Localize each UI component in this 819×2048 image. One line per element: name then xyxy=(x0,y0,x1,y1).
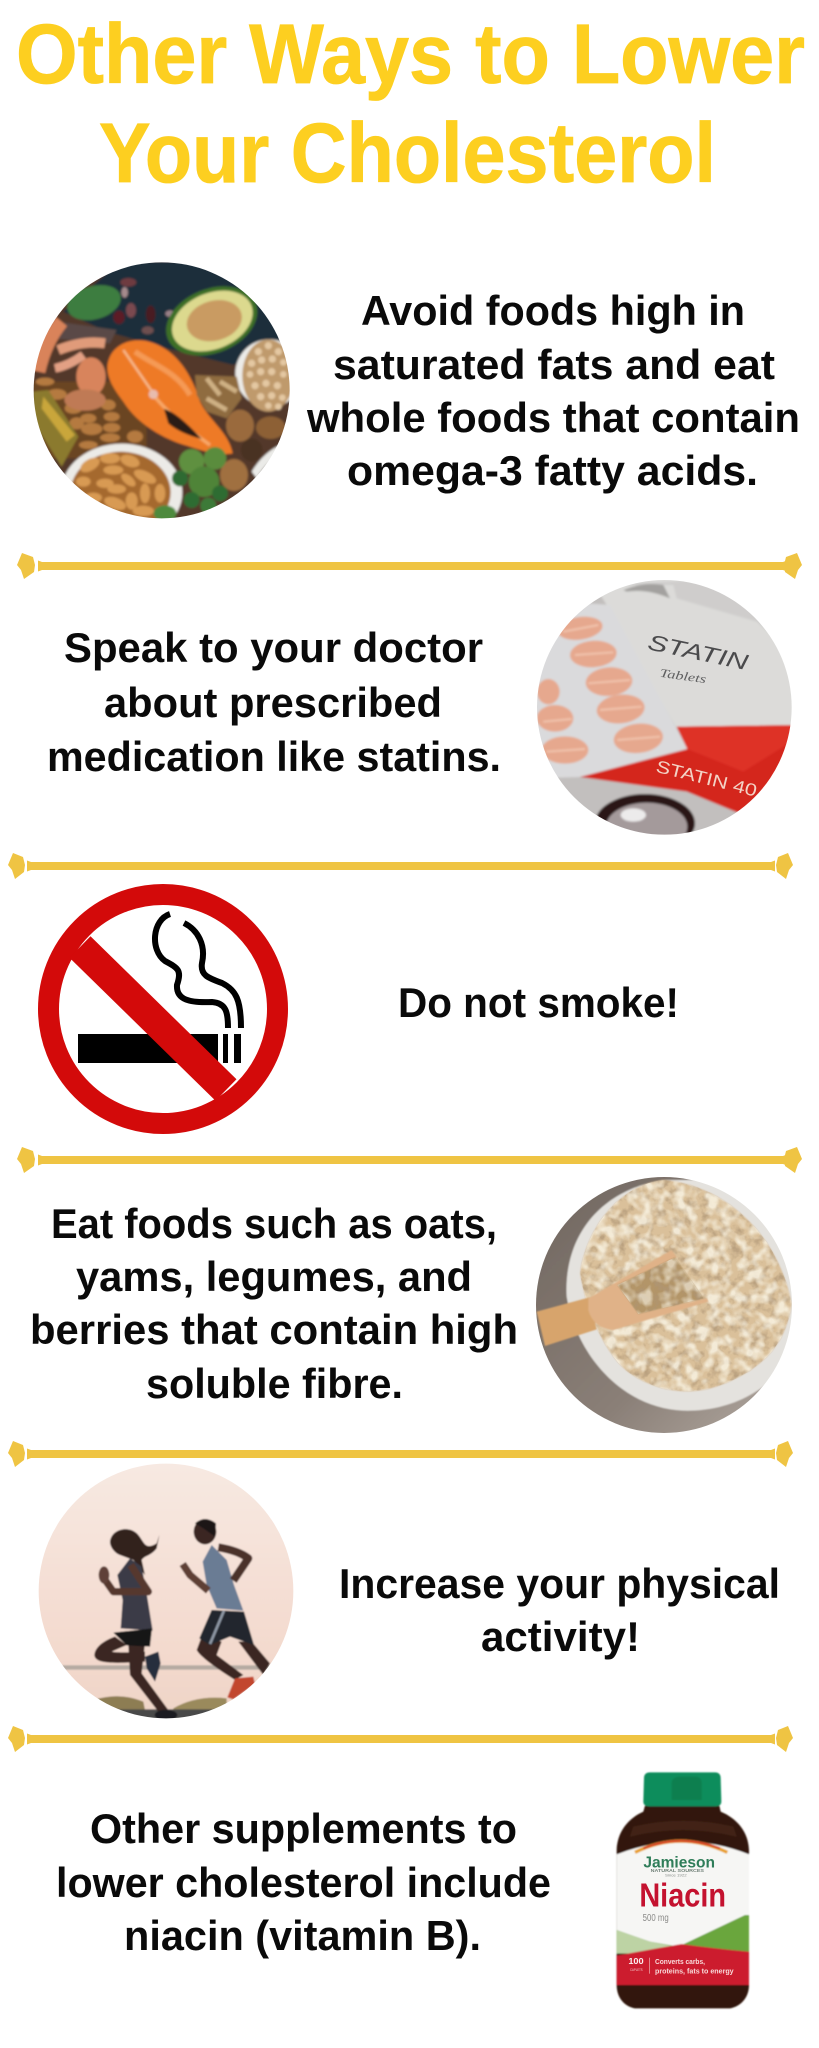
red band xyxy=(617,1944,749,1985)
divider 2 xyxy=(8,853,793,879)
woman runner xyxy=(110,1529,159,1575)
text: foods advice: omega-3 fatty acids. xyxy=(347,447,758,494)
bottle cap xyxy=(643,1772,721,1806)
text: fibre advice: berries that contain high xyxy=(30,1306,518,1353)
photo: niacin supplement bottle: Niacin xyxy=(639,1878,726,1915)
photo: niacin supplement bottle: 500 mg xyxy=(643,1913,669,1924)
blister pack xyxy=(533,603,687,778)
red box xyxy=(580,725,797,815)
shrimp xyxy=(38,322,62,372)
man runner xyxy=(194,1519,216,1544)
divider 5 xyxy=(8,1726,793,1752)
text: supplements advice: niacin (vitamin B). xyxy=(124,1912,481,1959)
panel: do not smoke xyxy=(48,894,679,1124)
text: do not smoke: Do not smoke! xyxy=(398,979,679,1026)
panel: statins xyxy=(47,578,797,853)
panel: physical activity xyxy=(37,1462,780,1723)
broccoli xyxy=(179,449,204,474)
text: supplements advice xyxy=(56,1805,551,1959)
icon: no smoking sign xyxy=(48,894,278,1124)
photo: niacin supplement bottle: Jamieson xyxy=(643,1854,715,1871)
label xyxy=(617,1841,749,1953)
text: fibre advice: yams, legumes, and xyxy=(76,1253,472,1300)
photo: niacin supplement bottle: CAPLETS xyxy=(630,1968,643,1972)
almond bowl xyxy=(64,442,184,518)
text: activity advice xyxy=(339,1560,780,1660)
avocado xyxy=(164,285,258,357)
photo: niacin supplement bottle: 100 xyxy=(628,1956,644,1966)
text: foods advice: Avoid foods high in xyxy=(361,287,745,334)
text: supplements advice: Other supplements to xyxy=(90,1805,517,1852)
text: foods advice: whole foods that contain xyxy=(306,394,800,441)
photo: bowl of oats xyxy=(533,1173,797,1437)
title: Your Cholesterol xyxy=(99,106,716,200)
photo: niacin supplement bottle: Converts carbs, xyxy=(655,1957,705,1966)
title xyxy=(16,7,805,200)
printed box text: STATIN xyxy=(646,629,750,675)
almonds left xyxy=(33,382,147,458)
photo: two runners xyxy=(37,1462,297,1723)
walnuts xyxy=(195,375,242,418)
salmon steak xyxy=(107,340,233,454)
divider 1 xyxy=(17,553,802,579)
text: fibre advice xyxy=(30,1200,518,1407)
text: statins advice xyxy=(47,624,501,780)
spinach leaf xyxy=(66,284,122,322)
text: activity advice: activity! xyxy=(481,1613,640,1660)
stethoscope disc xyxy=(596,792,696,833)
photo: statin tablets: Tablets xyxy=(659,666,708,686)
divider 4 xyxy=(8,1441,793,1467)
photo: omega-3 foods xyxy=(34,262,290,518)
text: supplements advice: lower cholesterol include xyxy=(56,1859,551,1906)
wooden scoop xyxy=(537,1297,597,1346)
text: statins advice: medication like statins. xyxy=(47,733,501,780)
photo: niacin supplement bottle: proteins, fats to energy xyxy=(655,1966,734,1975)
panel: supplements xyxy=(56,1772,749,2008)
divider 3 xyxy=(17,1147,802,1173)
oil bottle xyxy=(33,390,78,467)
text: activity advice: Increase your physical xyxy=(339,1560,780,1607)
text: foods advice: saturated fats and eat xyxy=(333,341,775,388)
chickpea bowl xyxy=(233,337,290,405)
photo: niacin supplement bottle: Since 1922 xyxy=(665,1873,688,1878)
text: statins advice: about prescribed xyxy=(104,679,442,726)
text: fibre advice: Eat foods such as oats, xyxy=(51,1200,497,1247)
photo: niacin supplement bottle: NATURAL SOURCES xyxy=(651,1868,704,1873)
bottle body xyxy=(617,1806,749,2008)
photo: niacin supplement bottle xyxy=(617,1772,749,2008)
text: fibre advice: soluble fibre. xyxy=(146,1360,403,1407)
photo: statin tablets: STATIN 40 xyxy=(654,756,759,801)
text: foods advice xyxy=(306,287,800,494)
panel: healthy foods xyxy=(30,258,800,541)
text: statins advice: Speak to your doctor xyxy=(64,624,483,671)
photo: statin tablets xyxy=(533,578,797,853)
panel: soluble fibre xyxy=(30,1173,797,1437)
